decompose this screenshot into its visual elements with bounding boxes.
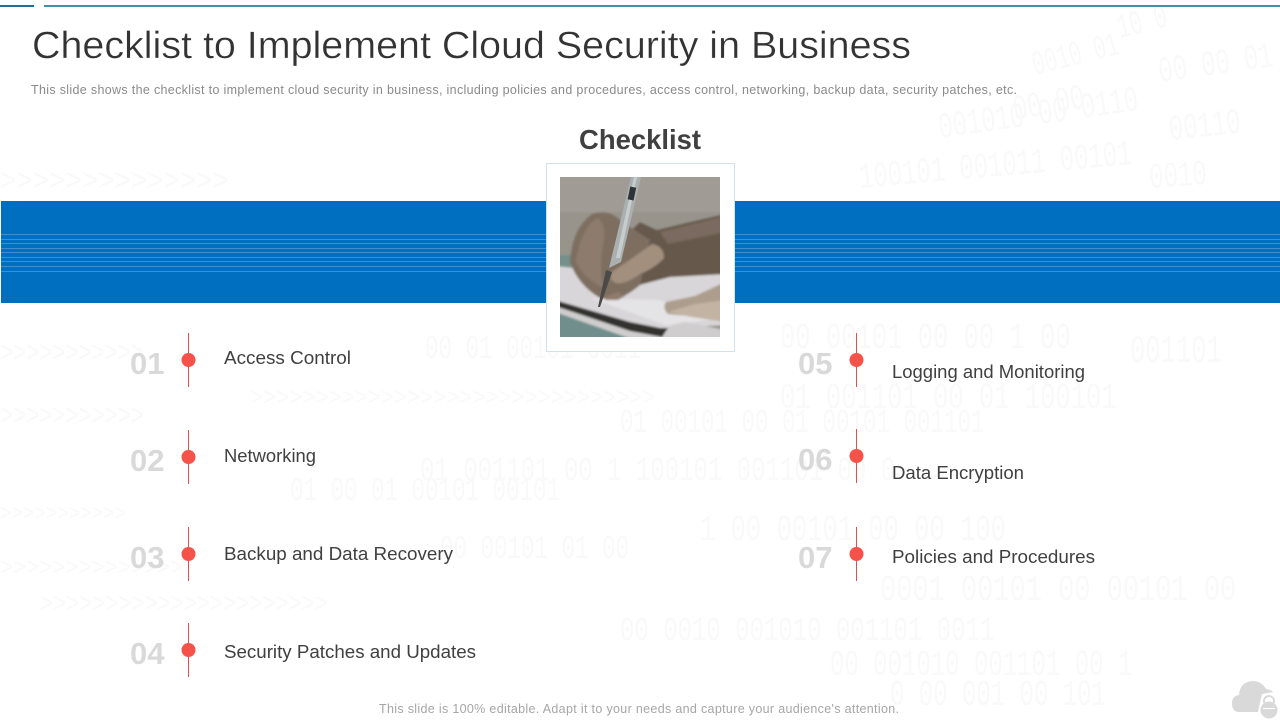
background: faint binary pattern: 0001 00101 00 00101 00 [880, 571, 1236, 611]
background: faint binary pattern: >>>>>>>>>>>>>> [0, 163, 229, 197]
checklist item 02 [130, 430, 316, 484]
photo frame [546, 164, 734, 352]
checklist item 03: Backup and Data Recovery [224, 544, 453, 564]
background: faint binary pattern: 01 00101 00 01 00101 001101 [620, 405, 984, 443]
checklist item 06: 06 [798, 442, 832, 477]
checklist item 02: 02 [130, 443, 164, 478]
background: faint binary pattern: 01 001101 00 01 100101 [780, 379, 1117, 420]
heading: checklist: Checklist [579, 124, 701, 155]
background: faint binary pattern: >>>>>>>>>>>>>> [0, 553, 183, 581]
icon: cloud with lock [1232, 681, 1278, 719]
background: faint binary pattern: >>>>>>>>>>> [0, 398, 144, 432]
background: faint binary pattern: 00 01 00101 0011 [425, 331, 641, 369]
checklist item 04: 04 [130, 636, 165, 671]
background: faint binary pattern: 0010 01 [1028, 26, 1123, 86]
background: faint binary pattern: 01 001101 00 1 100101 001101 00 0 [420, 453, 895, 490]
checklist item 02: Networking [224, 446, 316, 466]
background: faint binary pattern: 1 00 00101 00 00 100 [700, 511, 1006, 552]
background: faint binary pattern: 0010 [1148, 156, 1208, 200]
checklist item 06: Data Encryption [892, 463, 1024, 483]
checklist item 05: Logging and Monitoring [892, 362, 1085, 382]
background: faint binary pattern: 00 00101 01 00 [440, 531, 629, 569]
checklist item 01: 01 [130, 346, 164, 381]
background: faint binary pattern: >>>>>>>>>>>>>>>>>>>>>>>>>>>>>>> [250, 383, 655, 411]
blue band [1, 201, 1280, 303]
title: Checklist to Implement Cloud Security in Business [32, 25, 911, 67]
background: faint binary pattern: 001010 00 0110 [936, 82, 1141, 150]
background: faint binary pattern: 00 0010 001010 001101 0011 [620, 613, 994, 650]
background: faint binary pattern: >>>>>>>>>>> [0, 501, 126, 525]
background: faint binary pattern: 100101 001011 00101 [858, 136, 1133, 200]
checklist item 03: 03 [130, 540, 164, 575]
background: faint binary pattern: 01 00 01 00101 00101 [290, 473, 560, 511]
photo: hand writing with pen [560, 177, 720, 337]
background: faint binary pattern: 00 00 [1010, 80, 1088, 132]
checklist item 07: 07 [798, 540, 832, 575]
background: faint binary pattern: 00 00101 00 00 1 00 [780, 319, 1071, 360]
background: faint binary pattern: 0 00 001 00 101 [890, 677, 1106, 717]
background: faint binary pattern: 00110 [1167, 104, 1243, 152]
subtitle: This slide shows the checklist to implement cloud security in business, including policies and procedures, access control, networking, backup data, security patches, etc. [31, 83, 1017, 97]
checklist item 05 [798, 333, 1085, 387]
checklist item 05: 05 [798, 346, 832, 381]
checklist item 04: Security Patches and Updates [224, 642, 476, 662]
checklist item 01 [130, 333, 351, 387]
background: faint binary pattern: >>>>>>>>>>>>>>>>>>>>>> [40, 588, 328, 619]
background: faint binary pattern: 001101 [1130, 330, 1222, 374]
checklist item 04 [130, 623, 476, 677]
background: faint binary pattern: 00 00 01 [1156, 38, 1276, 94]
checklist item 01: Access Control [224, 348, 351, 368]
checklist item 07: Policies and Procedures [892, 547, 1095, 567]
checklist item 06 [798, 429, 1024, 483]
background: faint binary pattern: >>>>>>>>>>> [0, 335, 144, 369]
top accent rule [0, 5, 1280, 7]
background: faint binary pattern: 00 001010 001101 00 1 [830, 647, 1132, 687]
footer note: This slide is 100% editable. Adapt it to your needs and capture your audience's attention. [379, 702, 899, 716]
checklist item 03 [130, 527, 453, 581]
checklist item 07 [798, 527, 1095, 581]
